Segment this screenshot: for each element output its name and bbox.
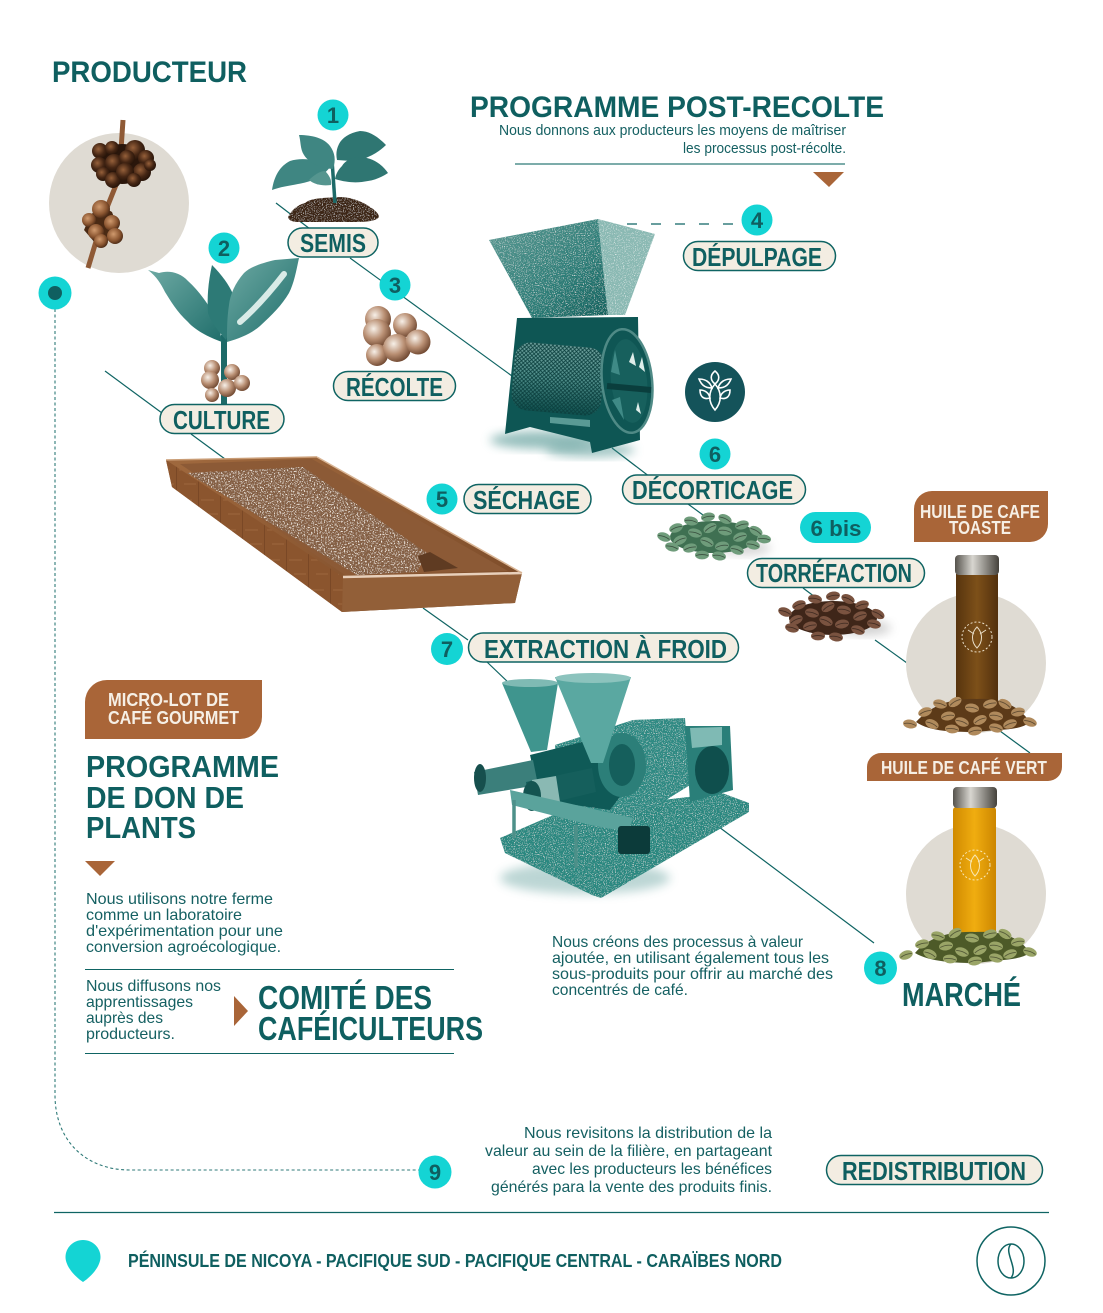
text block: redistribution [485,1125,773,1196]
step number 9 [418,1156,452,1188]
text block: farm laboratory: comme un laboratoire [86,907,242,924]
start marker [38,276,72,310]
label: huile de café toasté [914,491,1048,542]
text block: post-harvest intro: les processus post-récolte. [683,141,846,157]
product: green coffee oil bottle [906,787,1046,964]
icon: roasted beans pile [777,590,891,643]
icon: coffee branch in circle [49,120,189,273]
footer regions: PÉNINSULE DE NICOYA - PACIFIQUE SUD - PACIFIQUE CENTRAL - CARAÏBES NORD [128,1250,782,1271]
label: torréfaction: TORRÉFACTION [756,558,912,588]
heading: programme de don de plants: PROGRAMME [86,749,279,784]
text block: sharing learnings: auprès des [86,1010,163,1027]
step number 5: 5 [436,487,448,512]
step number 2 [208,232,240,264]
step number 3: 3 [389,273,401,298]
label: dépulpage: DÉPULPAGE [692,242,822,272]
text block: value-added processes [552,934,833,999]
text block: sharing learnings: Nous diffusons nos [86,978,221,995]
illustration: depulping machine [489,219,657,457]
text block: redistribution: générés para la vente des produits finis. [491,1179,772,1196]
icon: green beans pile [656,511,771,562]
label: huile de café toasté: TOASTE [949,518,1011,538]
icon: beans under roasted oil bottle [902,695,1038,737]
step number 6 [700,438,730,470]
text block: post-harvest intro: Nous donnons aux producteurs les moyens de maîtriser [499,123,846,139]
product: roasted coffee oil bottle [906,555,1046,733]
label: extraction à froid: EXTRACTION À FROID [484,634,727,664]
badge: micro-lot: MICRO-LOT DE [108,690,229,710]
label: décorticage: DÉCORTICAGE [632,475,793,505]
icon: coffee plant with berries [148,258,299,404]
icon: harvested berries [363,306,430,366]
step number 7: 7 [441,637,453,662]
title: producteur: PRODUCTEUR [52,56,247,89]
icon: beans under green oil bottle [898,926,1038,967]
text block: redistribution: avec les producteurs les bénéfices [532,1161,772,1178]
label: séchage: SÉCHAGE [473,485,580,515]
heading: marché: MARCHÉ [902,976,1021,1013]
step number 5 [426,484,458,514]
step number 8: 8 [874,956,887,981]
label: semis: SEMIS [300,228,366,258]
heading: comité des caféiculteurs: CAFÉICULTEURS [258,1010,483,1047]
step number 3 [380,270,410,300]
text block: sharing learnings [86,978,221,1043]
text block: sharing learnings: producteurs. [86,1026,175,1043]
arrow: plants down triangle [85,861,115,876]
icon: coffee bean badge [977,1227,1045,1295]
step 6 bis [800,512,871,543]
text block: value-added processes: concentrés de café. [552,982,688,999]
text block: value-added processes: ajoutée, en utilisant également tous les [552,950,829,967]
dotted path to redistribution [55,309,420,1170]
step number 1: 1 [327,103,339,128]
step number 9: 9 [429,1160,441,1185]
heading: comité des caféiculteurs: COMITÉ DES [258,979,432,1016]
heading: programme de don de plants: DE DON DE [86,780,244,815]
label: huile de café vert: HUILE DE CAFÉ VERT [881,757,1048,778]
text block: farm laboratory: conversion agroécologique. [86,939,281,956]
text block: farm laboratory: d'expérimentation pour une [86,923,283,940]
text block: post-harvest intro [499,123,846,157]
step number 1 [318,100,348,130]
text block: value-added processes: sous-produits pour offrir au marché des [552,966,833,983]
illustration: drying tray [166,457,522,612]
step number 7 [431,633,463,665]
label: huile de café toasté: HUILE DE CAFE [920,502,1040,522]
icon: brand logo [685,362,745,422]
step number 6: 6 [709,442,721,467]
heading: programme de don de plants: PLANTS [86,810,196,845]
step number 4: 4 [751,208,764,233]
icon: seedling [272,131,388,222]
text block: farm laboratory [86,891,283,956]
illustration: cold press machine [474,673,749,898]
heading: programme de don de plants [86,749,279,845]
label: huile de café vert [867,753,1062,781]
step number 8 [864,952,897,984]
heading: comité des caféiculteurs [258,979,483,1047]
text block: farm laboratory: Nous utilisons notre ferme [86,891,273,908]
step 6 bis: 6 bis [810,516,862,541]
text block: value-added processes: Nous créons des processus à valeur [552,934,804,951]
arrow: right triangle [234,996,248,1026]
step number 4 [742,204,772,236]
arrow: post-harvest down triangle [813,172,844,187]
text block: redistribution: valeur au sein de la filière, en partageant [485,1143,773,1160]
label: redistribution: REDISTRIBUTION [842,1156,1026,1186]
badge: micro-lot [85,680,262,739]
icon: location pin [66,1240,100,1282]
text block: redistribution: Nous revisitons la distribution de la [524,1125,772,1142]
text block: sharing learnings: apprentissages [86,994,193,1011]
label: récolte: RÉCOLTE [346,372,443,402]
heading: programme post-récolte: PROGRAMME POST-RECOLTE [470,91,884,124]
label: culture: CULTURE [173,405,270,435]
badge: micro-lot: CAFÉ GOURMET [108,707,239,728]
step number 2: 2 [218,236,230,261]
connector lines [105,203,1030,943]
